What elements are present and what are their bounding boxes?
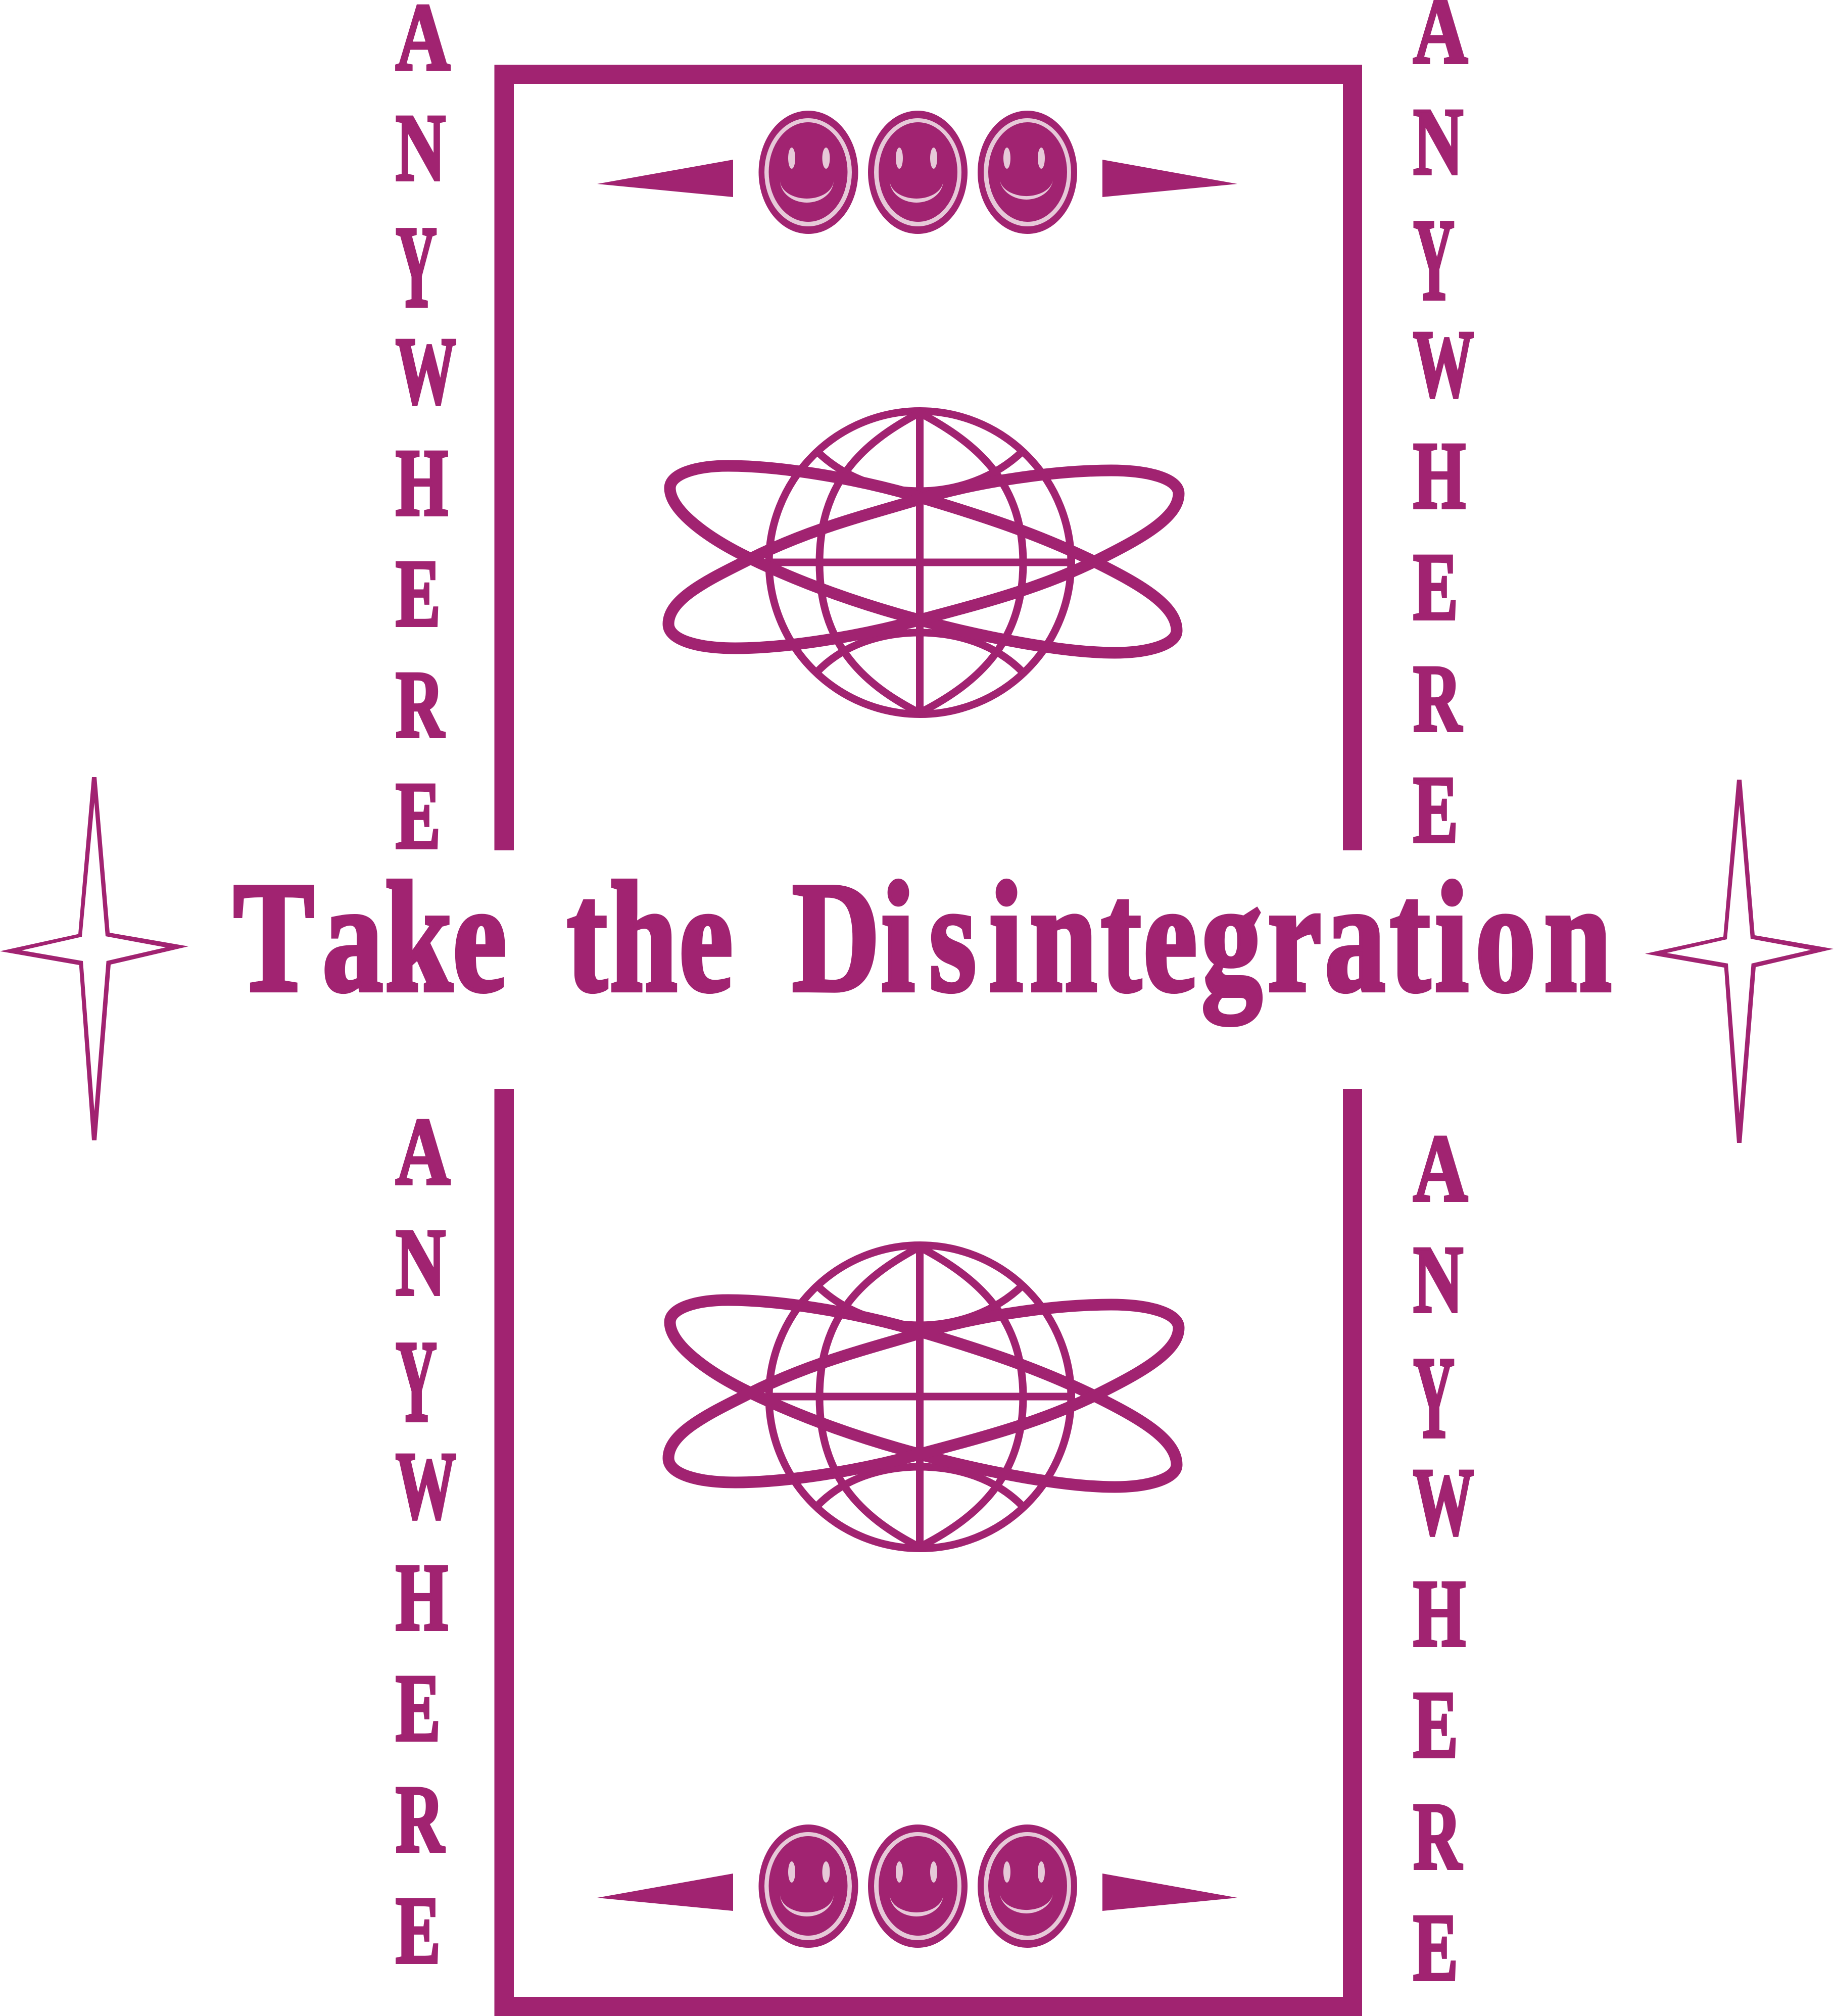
upper frame bbox=[494, 65, 1362, 850]
vertical text: upper right ANYWHERE: R bbox=[1413, 646, 1462, 752]
title: Take the Disintegration bbox=[233, 850, 1612, 1027]
vertical text: lower right ANYWHERE: A bbox=[1413, 1116, 1468, 1222]
icon: lower globe with orbits bbox=[668, 1243, 1179, 1550]
vertical text: lower left ANYWHERE: H bbox=[396, 1545, 448, 1651]
vertical text: upper left ANYWHERE: Y bbox=[396, 202, 437, 332]
vertical text: upper left ANYWHERE: E bbox=[396, 541, 441, 647]
vertical text: lower right ANYWHERE: E bbox=[1413, 1895, 1458, 2001]
vertical text: lower left ANYWHERE: N bbox=[396, 1210, 446, 1316]
vertical text: upper left ANYWHERE: H bbox=[396, 430, 448, 536]
icon: smiley 1 bbox=[759, 1825, 858, 1948]
vertical text: upper left ANYWHERE: N bbox=[396, 95, 446, 201]
vertical text: lower left ANYWHERE: A bbox=[396, 1099, 450, 1205]
vertical text: upper right ANYWHERE: N bbox=[1413, 89, 1463, 195]
vertical text: lower right ANYWHERE: W bbox=[1413, 1449, 1474, 1555]
top ornament row bbox=[597, 111, 1237, 234]
icon: upper globe with orbits bbox=[668, 409, 1179, 715]
icon: smiley 1 bbox=[759, 111, 858, 234]
vertical text: lower right ANYWHERE: N bbox=[1413, 1227, 1463, 1333]
vertical text: lower right ANYWHERE: R bbox=[1413, 1784, 1462, 1890]
vertical text: lower right ANYWHERE bbox=[1413, 1116, 1474, 2001]
icon: smiley 2 bbox=[868, 1825, 968, 1948]
vertical text: upper right ANYWHERE bbox=[1413, 0, 1474, 863]
icon: smiley 2 bbox=[868, 111, 968, 234]
vertical text: lower left ANYWHERE: Y bbox=[396, 1317, 437, 1447]
vertical text: lower left ANYWHERE bbox=[396, 1099, 456, 1984]
vertical text: lower left ANYWHERE: E bbox=[396, 1878, 441, 1984]
icon: left four-point star bbox=[0, 777, 188, 1140]
vertical text: upper left ANYWHERE bbox=[396, 0, 456, 869]
left pointer triangle bbox=[597, 1874, 733, 1911]
vertical text: lower right ANYWHERE: Y bbox=[1413, 1333, 1455, 1463]
vertical text: upper right ANYWHERE: E bbox=[1413, 534, 1458, 640]
right pointer triangle bbox=[1102, 1874, 1237, 1911]
lower frame bbox=[494, 1089, 1362, 2016]
vertical text: lower right ANYWHERE: H bbox=[1413, 1561, 1466, 1667]
vertical text: lower left ANYWHERE: E bbox=[396, 1655, 441, 1761]
icon: right four-point star bbox=[1645, 780, 1833, 1143]
vertical text: lower right ANYWHERE: E bbox=[1413, 1672, 1458, 1778]
vertical text: lower left ANYWHERE: R bbox=[396, 1766, 445, 1873]
right pointer triangle bbox=[1102, 160, 1237, 197]
icon: smiley 3 bbox=[978, 111, 1077, 234]
vertical text: upper right ANYWHERE: E bbox=[1413, 757, 1458, 863]
vertical text: upper left ANYWHERE: R bbox=[396, 652, 445, 758]
vertical text: upper left ANYWHERE: W bbox=[396, 318, 456, 424]
vertical text: upper left ANYWHERE: E bbox=[396, 763, 441, 869]
icon: smiley 3 bbox=[978, 1825, 1077, 1948]
vertical text: upper right ANYWHERE: Y bbox=[1413, 195, 1455, 325]
vertical text: upper right ANYWHERE: H bbox=[1413, 423, 1466, 529]
vertical text: lower left ANYWHERE: W bbox=[396, 1433, 456, 1539]
vertical text: upper right ANYWHERE: W bbox=[1413, 311, 1474, 417]
bottom ornament row bbox=[597, 1825, 1237, 1948]
left pointer triangle bbox=[597, 160, 733, 197]
